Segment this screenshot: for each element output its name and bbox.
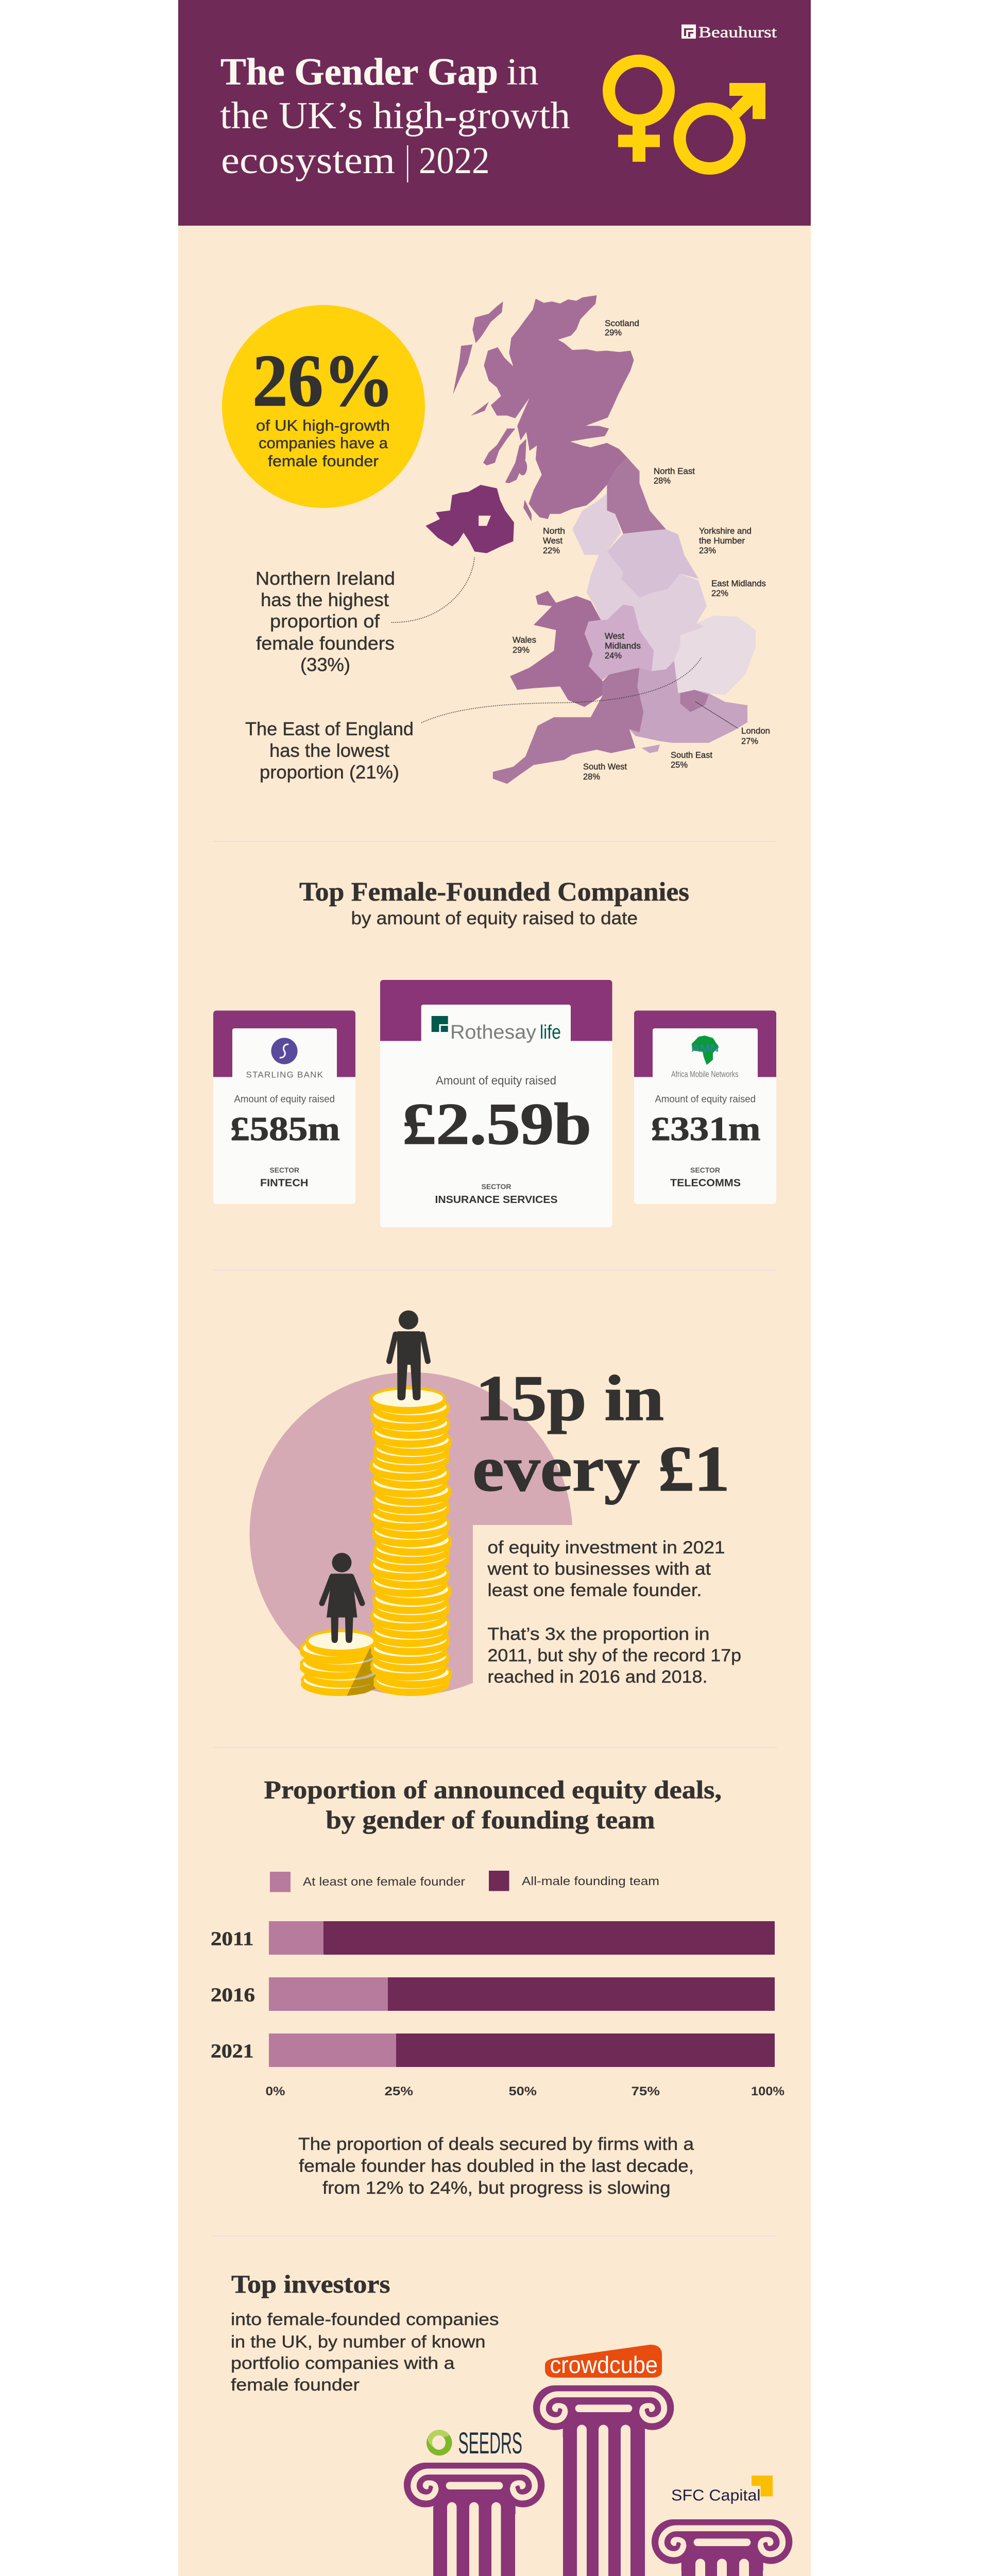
logo: Seedrs: SEEDRS (458, 2427, 522, 2460)
label: London: London (741, 726, 770, 736)
callout: East of England (245, 718, 414, 783)
column: Seedrs (404, 2427, 544, 2576)
label: East Midlands (711, 579, 766, 598)
label: South East: South East (671, 750, 712, 760)
bar: 2011: 2011 (211, 1928, 253, 1950)
text: amount raised label: Amount of equity raised (436, 1074, 556, 1087)
heading: top female-founded companies (299, 877, 689, 928)
logo: Starling Bank (246, 1038, 323, 1080)
stat callout: 26% (222, 305, 425, 508)
label: North East (654, 466, 695, 485)
illustration: coin stacks and pink circle (249, 1311, 591, 1700)
bar: 2016: 2016 (211, 1985, 255, 2006)
pillar (404, 2463, 544, 2576)
title: The Gender Gap (220, 51, 498, 93)
label: Wales (513, 635, 536, 655)
short coin stack (300, 1629, 380, 1696)
label: East Midlands: East Midlands (711, 579, 766, 588)
text: sector name: FINTECH (260, 1178, 308, 1189)
text: top investors description: portfolio companies with a (231, 2353, 455, 2372)
label: Yorkshire and the Humber: 23% (699, 546, 716, 555)
heading: proportion of announced equity deals: Proportion of announced equity deals, (264, 1775, 722, 1804)
pillar (533, 2385, 674, 2576)
tall coin stack (370, 1386, 452, 1696)
label: West Midlands: Midlands (605, 641, 641, 651)
bar: 2021: 2021 (211, 2040, 253, 2062)
x axis labels: 100% (751, 2084, 785, 2098)
text: equity investment explanation: went to businesses with at (487, 1559, 711, 1579)
logo: Crowdcube: crowdcube (550, 2351, 658, 2378)
title: the UK’s high-growth (220, 95, 570, 137)
heading: top female-founded companies: Top Female-Founded Companies (299, 877, 689, 907)
bar: 2016 (211, 1977, 775, 2011)
logo: Seedrs (427, 2427, 522, 2460)
x axis labels (266, 2084, 785, 2098)
text: sector label: SECTOR (481, 1182, 511, 1191)
callout: Northern Ireland: has the highest (261, 589, 389, 610)
region: Wales (510, 591, 603, 707)
text: amount raised label: Amount of equity raised (234, 1094, 335, 1105)
UK map (425, 295, 756, 784)
pink circle backdrop (249, 1372, 591, 1700)
x axis labels: 25% (384, 2084, 413, 2098)
title (220, 51, 570, 182)
label: Wales: Wales (513, 635, 536, 645)
logo: Rothesay Life (432, 1016, 561, 1043)
text: chart takeaway: female founder has doubled in the last decade, (299, 2157, 694, 2176)
text: chart takeaway (298, 2134, 694, 2198)
text: chart takeaway: from 12% to 24%, but progress is slowing (322, 2178, 671, 2198)
label: North East: 28% (654, 476, 671, 485)
label: Wales: 29% (513, 645, 530, 655)
label: Yorkshire and the Humber (699, 526, 752, 555)
bar chart: equity deals by founding team gender (211, 1921, 785, 2098)
heading: proportion of announced equity deals: by gender of founding team (326, 1805, 655, 1834)
icon: man (389, 1311, 428, 1400)
stat callout: 26%: 26% (252, 340, 394, 422)
region: Northern Ireland (425, 485, 514, 553)
pillar (652, 2519, 792, 2576)
page panel background (178, 0, 811, 2576)
text: equity investment explanation: reached in 2016 and 2018. (487, 1667, 708, 1687)
text: sector label: SECTOR (690, 1166, 720, 1174)
callout: East of England: The East of England (245, 718, 414, 739)
x axis labels: 75% (632, 2084, 660, 2098)
label: North East: North East (654, 466, 695, 476)
legend item: all-male founding team: All-male founding team (522, 1874, 659, 1888)
header banner (178, 0, 811, 226)
text: top investors description: into female-founded companies (231, 2310, 499, 2329)
text: equity investment explanation: 2011, but shy of the record 17p (487, 1646, 741, 1665)
region: North West (572, 494, 640, 620)
stat: 15p in every £1: 15p in (475, 1363, 664, 1434)
legend item: at least one female founder: At least one female founder (303, 1875, 465, 1888)
region: South East (629, 661, 747, 753)
heading: top investors: Top investors (231, 2269, 390, 2298)
region: South West (493, 668, 643, 784)
column: SFC Capital (652, 2476, 792, 2576)
label: North West (543, 526, 565, 555)
title: 2022 (419, 140, 489, 182)
label: West Midlands: West (605, 631, 624, 641)
heading: top female-founded companies: by amount of equity raised to date (351, 908, 638, 928)
stat callout: 26%: female founder (268, 453, 379, 470)
heading: proportion of announced equity deals (264, 1775, 722, 1834)
logo: Africa Mobile Networks: AMN (692, 1043, 719, 1054)
label: Yorkshire and the Humber: the Humber (699, 536, 745, 546)
label: South West (583, 761, 627, 782)
label: South West: South West (583, 761, 627, 772)
region: West Midlands (585, 604, 654, 681)
card: Rothesay Life (380, 980, 612, 1227)
label: Scotland: 29% (605, 328, 622, 337)
logo: SFC Capital (671, 2476, 773, 2504)
legend item: at least one female founder (270, 1872, 465, 1892)
map labels (513, 318, 770, 782)
bar: 2021 (211, 2033, 775, 2067)
label: West Midlands: 24% (605, 651, 622, 660)
stat: 15p in every £1: every £1 (472, 1433, 730, 1505)
region: East Midlands (634, 574, 707, 671)
value: £331m: £331m (651, 1110, 760, 1148)
text: sector name: INSURANCE SERVICES (435, 1194, 557, 1206)
logo: Africa Mobile Networks: Africa Mobile Networks (671, 1070, 739, 1079)
card: Africa Mobile Networks (634, 1011, 776, 1204)
icon: female symbol (609, 61, 669, 162)
label: North West: West (543, 536, 562, 546)
label: London (741, 726, 770, 746)
region: North East (607, 457, 666, 534)
stat: 15p in every £1 (472, 1363, 730, 1505)
callout: East of England: proportion (21%) (260, 761, 399, 783)
label: South East (671, 750, 712, 770)
label: North West: 22% (543, 546, 560, 555)
text: top investors description: in the UK, by number of known (231, 2332, 485, 2351)
text: equity investment explanation: That’s 3x the proportion in (487, 1624, 710, 1644)
callout: Northern Ireland: Northern Ireland (255, 568, 395, 589)
text: sector name: TELECOMMS (670, 1178, 741, 1189)
legend (270, 1871, 659, 1892)
text: top investors description: female founder (231, 2375, 360, 2394)
value: £585m: £585m (230, 1110, 340, 1148)
arrow: Northern Ireland dotted leader (391, 557, 474, 622)
column: Crowdcube (533, 2345, 674, 2576)
card: Starling Bank (213, 1011, 355, 1204)
text: equity investment explanation: least one female founder. (487, 1581, 702, 1600)
callout: Northern Ireland: female founders (256, 633, 395, 654)
text: equity investment explanation: of equity investment in 2021 (487, 1538, 725, 1557)
text: sector label: SECTOR (270, 1166, 299, 1174)
region: East of England (674, 616, 756, 695)
bar: 2011 (211, 1921, 775, 1955)
title: ecosystem (221, 140, 395, 182)
icon: woman (322, 1553, 362, 1643)
arrow: East of England dotted leader (421, 657, 702, 723)
logo: Africa Mobile Networks (671, 1036, 739, 1079)
stat callout: 26%: of UK high-growth (256, 417, 390, 434)
label: Scotland (605, 318, 639, 337)
legend item: all-male founding team (489, 1871, 659, 1891)
stat callout: 26%: companies have a (259, 435, 388, 452)
logo: Rothesay Life: Rothesay (450, 1022, 536, 1043)
logo: Rothesay Life: life (540, 1022, 561, 1043)
label: East Midlands: 22% (711, 588, 728, 598)
label: Scotland: Scotland (605, 318, 639, 328)
region: Scotland (453, 295, 634, 521)
label: Yorkshire and the Humber: Yorkshire and (699, 526, 752, 536)
logo: Starling Bank: STARLING BANK (246, 1070, 323, 1080)
text: amount raised label: Amount of equity raised (655, 1094, 756, 1105)
label: London: 27% (741, 736, 758, 746)
text: equity investment explanation (487, 1538, 741, 1687)
region: Yorkshire and the Humber (607, 529, 698, 598)
callout: Northern Ireland: proportion of (270, 611, 380, 632)
London leader line (695, 702, 738, 728)
callout: Northern Ireland: (33%) (300, 654, 350, 675)
x axis labels: 50% (509, 2084, 537, 2098)
logo: Beauhurst (681, 23, 777, 41)
x axis labels: 0% (266, 2084, 285, 2098)
label: West Midlands (605, 631, 641, 660)
label: South West: 28% (583, 772, 600, 782)
logo: Beauhurst: Beauhurst (698, 23, 777, 41)
label: South East: 25% (671, 760, 688, 770)
text: top investors description (231, 2310, 499, 2394)
title: in (506, 51, 539, 93)
callout: Northern Ireland (255, 568, 395, 675)
icon: male symbol (680, 83, 765, 168)
value: £2.59b: £2.59b (402, 1091, 591, 1157)
label: North West: North (543, 526, 565, 536)
text: chart takeaway: The proportion of deals secured by firms with a (298, 2134, 694, 2154)
callout: East of England: has the lowest (269, 740, 389, 761)
logo: SFC Capital: SFC Capital (671, 2486, 760, 2504)
region: London (680, 690, 709, 712)
